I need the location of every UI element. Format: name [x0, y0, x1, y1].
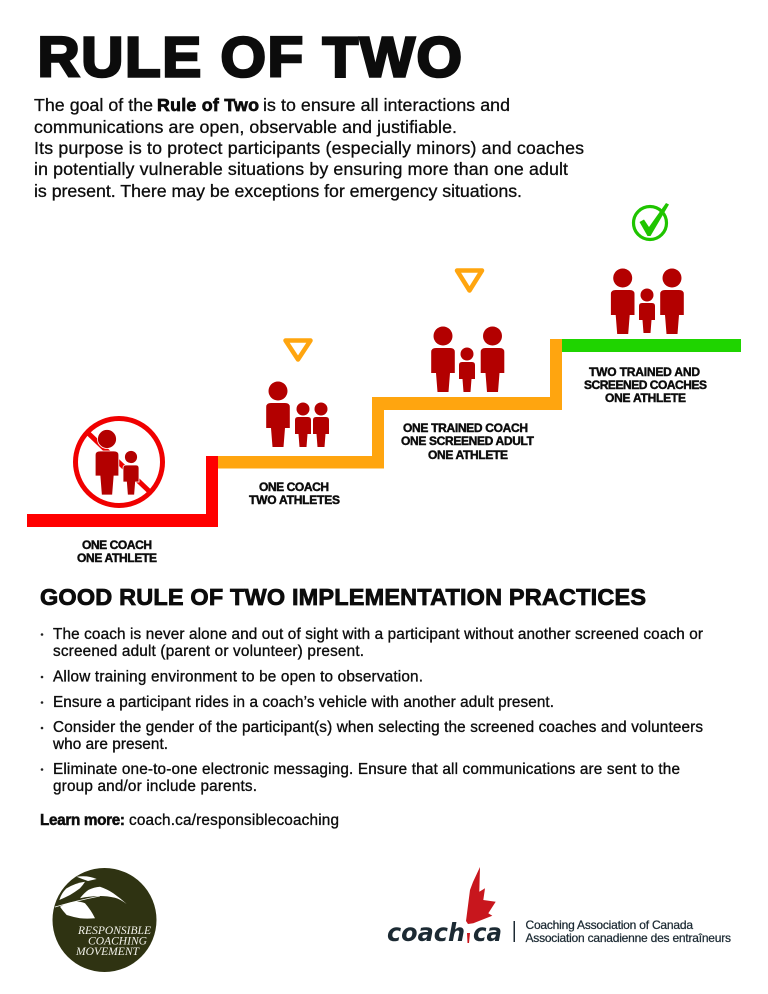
- label: one coach two athletes: TWO ATHLETES: [249, 493, 340, 507]
- practices list: screened adult (parent or volunteer) present.: [53, 643, 364, 660]
- intro text block: in potentially vulnerable situations by ensuring more than one adult: [34, 159, 568, 179]
- learn more link: Learn more:: [40, 812, 125, 829]
- practices list: [41, 626, 703, 795]
- logo text: MOVEMENT: [75, 946, 141, 958]
- icon: leaves: [55, 876, 127, 919]
- intro text block: communications are open, observable and justifiable.: [34, 117, 457, 137]
- practices list: Allow training environment to be open to observation.: [53, 668, 423, 686]
- practices list: who are present.: [52, 736, 168, 753]
- icon: green check: [634, 203, 669, 240]
- learn more link: coach.ca/responsiblecoaching: [129, 812, 339, 829]
- icon: two coaches one athlete figures: [611, 268, 684, 334]
- logo: coach.ca: [387, 867, 731, 947]
- logo: coach.ca: coach: [387, 918, 465, 947]
- intro text block: The goal of the: [34, 95, 153, 115]
- logo: coach.ca: Coaching Association of Canada: [526, 918, 693, 932]
- intro text block: is to ensure all interactions and: [263, 95, 510, 115]
- logo text: COACHING: [88, 936, 148, 948]
- staircase chart: [27, 339, 741, 527]
- intro text block: Rule of Two: [157, 95, 259, 115]
- logo: coach.ca: ca: [473, 918, 502, 947]
- label: two trained and screened coaches: SCREENED COACHES: [584, 378, 707, 392]
- practices list: The coach is never alone and out of sight with a participant without another screened coach or: [53, 626, 703, 643]
- label: one coach two athletes: [249, 480, 340, 507]
- label: one trained coach: ONE SCREENED ADULT: [401, 434, 535, 448]
- practices list: Eliminate one-to-one electronic messaging. Ensure that all communications are sent to the: [53, 761, 680, 778]
- label: one trained coach: ONE ATHLETE: [428, 448, 508, 462]
- label: two trained and screened coaches: ONE ATHLETE: [605, 391, 686, 405]
- label: one coach one athlete: ONE ATHLETE: [77, 551, 157, 565]
- label: one trained coach: ONE TRAINED COACH: [403, 421, 528, 435]
- step 1: red step: [27, 456, 218, 527]
- logo text: [75, 925, 151, 958]
- icon: maple leaf: [466, 867, 496, 943]
- logo: responsible coaching movement: [52, 868, 156, 972]
- intro text block: is present. There may be exceptions for emergency situations.: [34, 181, 522, 201]
- label: one coach one athlete: ONE COACH: [82, 538, 152, 552]
- icon: one trained coach, screened adult, athlete figures: [431, 326, 504, 392]
- intro text block: [34, 95, 584, 201]
- intro text block: Its purpose is to protect participants (especially minors) and coaches: [34, 138, 584, 158]
- logo text: RESPONSIBLE: [77, 925, 151, 937]
- label: one coach one athlete: [77, 538, 157, 565]
- icon: prohibited one coach one athlete: [76, 418, 162, 506]
- icon: caution triangle step 3: [457, 270, 482, 290]
- icon: one coach two athletes figures: [266, 382, 329, 447]
- icon: caution triangle step 2: [286, 340, 310, 360]
- step 3: green step: [562, 339, 741, 352]
- label: two trained and screened coaches: [584, 365, 707, 405]
- practices list: Consider the gender of the participant(s) when selecting the screened coaches and volunteers: [53, 719, 703, 736]
- title: RULE OF TWO: [38, 26, 464, 90]
- step 2: orange step: [218, 339, 562, 468]
- practices list: group and/or include parents.: [53, 778, 257, 795]
- label: two trained and screened coaches: TWO TRAINED AND: [589, 365, 700, 379]
- logo: coach.ca: Association canadienne des entraîneurs: [526, 931, 731, 945]
- practices list: Ensure a participant rides in a coach’s vehicle with another adult present.: [53, 694, 554, 711]
- label: one coach two athletes: ONE COACH: [259, 480, 329, 494]
- heading: practices: GOOD RULE OF TWO IMPLEMENTATION PRACTICES: [40, 584, 646, 610]
- label: one trained coach: [401, 421, 535, 462]
